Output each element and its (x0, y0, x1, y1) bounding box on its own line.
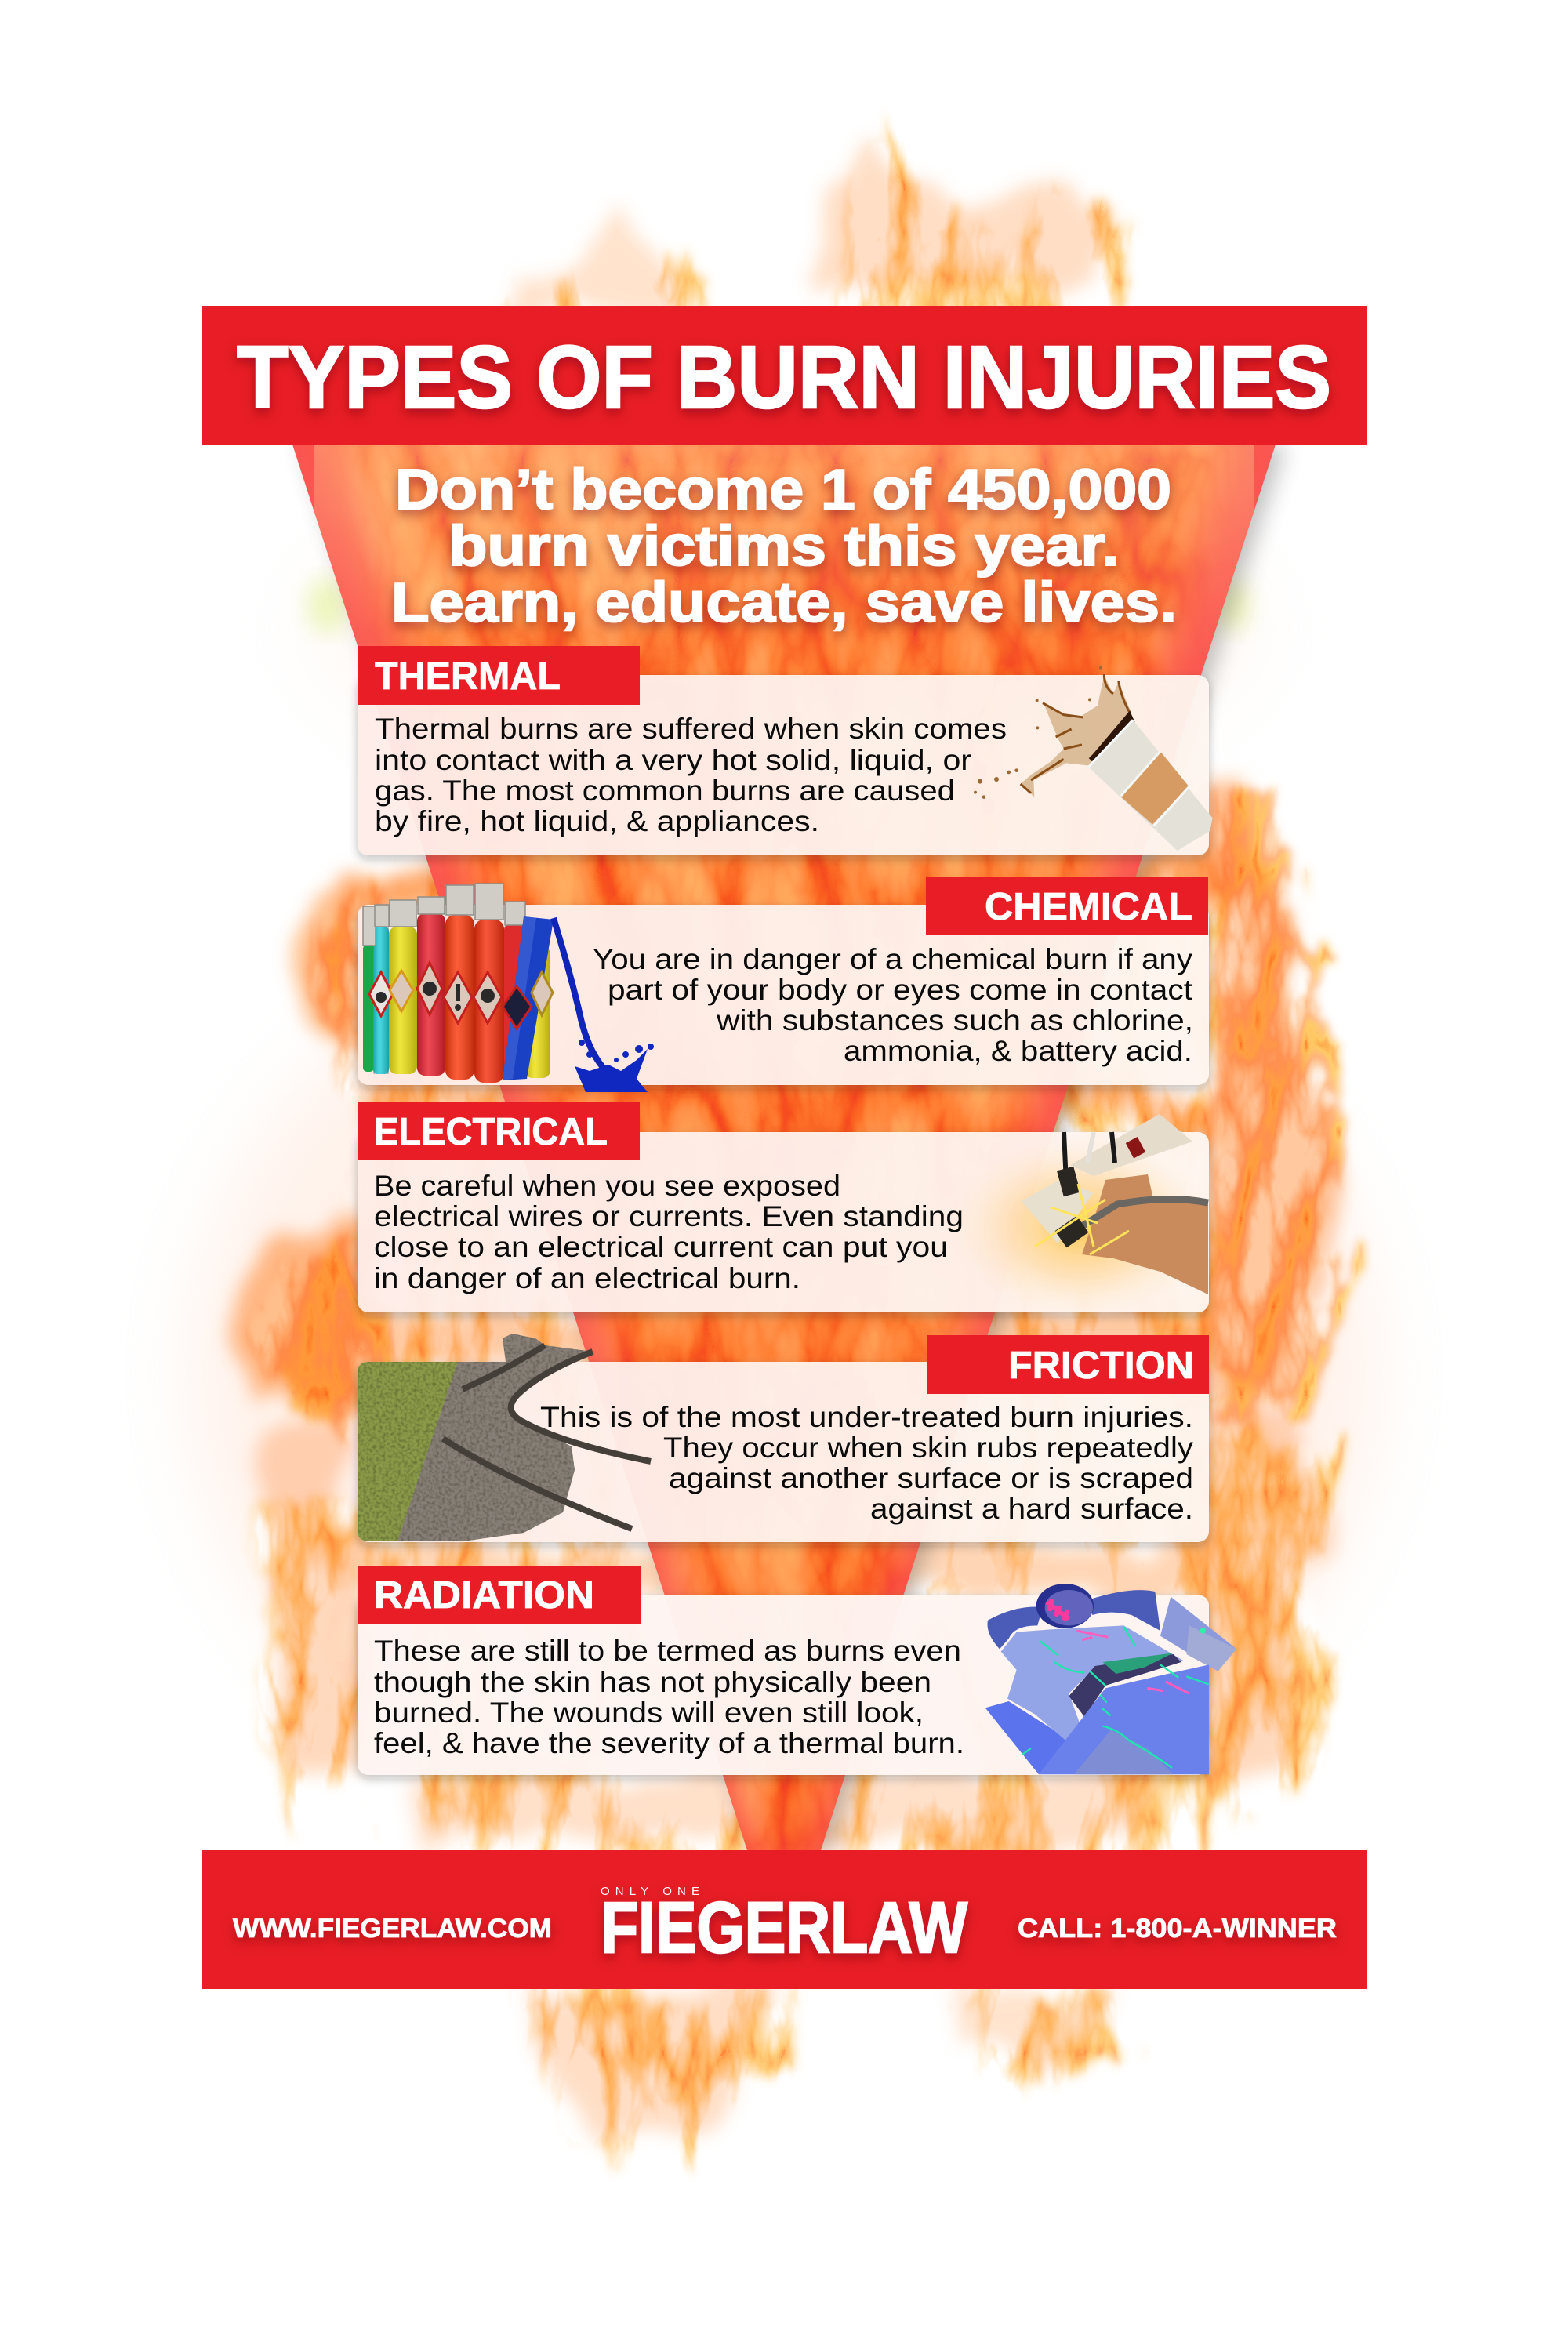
heading tag: radiation: RADIATION (374, 1574, 594, 1617)
text: friction: This is of the most under-treated burn injuries. (540, 1401, 1193, 1433)
text: radiation: though the skin has not physically been (374, 1666, 931, 1698)
icon: sparking power strip and hand (953, 1114, 1211, 1317)
text: electrical (374, 1170, 964, 1294)
heading tag: radiation (358, 1566, 641, 1624)
funnel with fire (292, 445, 1276, 1850)
heading tag: electrical (358, 1102, 640, 1160)
panel: radiation (358, 1566, 1236, 1775)
infographic (183, 114, 1385, 2176)
logo: FIEGERLAW (601, 1888, 967, 1968)
panel: friction (358, 1334, 1209, 1542)
heading tag: chemical: CHEMICAL (985, 886, 1192, 928)
text: thermal: into contact with a very hot solid, liquid, or (375, 744, 971, 776)
icon: chemical tubes (363, 884, 608, 1083)
heading tag: thermal (358, 646, 640, 705)
text: thermal (375, 713, 1007, 837)
text: electrical: in danger of an electrical burn. (374, 1262, 800, 1294)
text: electrical: close to an electrical current can put you (374, 1231, 948, 1263)
icon: road with skid marks (358, 1334, 651, 1541)
text: thermal: Thermal burns are suffered when skin comes (375, 713, 1007, 745)
background: saturated side flames (243, 757, 1333, 1419)
background: flame halo (188, 447, 1380, 1858)
text: friction (540, 1401, 1194, 1525)
background: yellow flame glints (307, 577, 1250, 633)
text: friction: against another surface or is scraped (669, 1462, 1193, 1494)
subtitle: Don’t become 1 of 450,000 (395, 459, 1171, 521)
panel: chemical (358, 877, 1209, 1092)
background: peach flame wash (243, 133, 1333, 2132)
funnel shadow (302, 445, 1286, 1850)
icon: radiation therapy patient (985, 1584, 1236, 1774)
icon: spilled coffee cup (974, 666, 1213, 851)
text: chemical: ammonia, & battery acid. (844, 1035, 1192, 1067)
icon: blue splash (575, 1040, 654, 1092)
heading tag: friction: FRICTION (1008, 1345, 1194, 1387)
text: electrical: electrical wires or currents. Even standing (374, 1200, 964, 1232)
text: electrical: Be careful when you see exposed (374, 1170, 840, 1202)
logo: ONLY ONE (601, 1885, 699, 1898)
panel: thermal (358, 646, 1213, 855)
text: radiation (374, 1635, 964, 1759)
text: chemical: with substances such as chlorine, (716, 1004, 1193, 1036)
text: radiation: These are still to be termed as burns even (374, 1635, 961, 1667)
subtitle: Learn, educate, save lives. (391, 572, 1177, 634)
title banner (202, 306, 1367, 445)
panel: electrical (358, 1102, 1211, 1317)
title: TYPES OF BURN INJURIES (237, 328, 1331, 426)
heading tag: electrical: ELECTRICAL (374, 1111, 608, 1153)
text: thermal: by fire, hot liquid, & appliances. (375, 805, 819, 837)
heading tag: friction (927, 1335, 1209, 1394)
background: pale flames (235, 110, 1317, 2148)
footer website: WWW.FIEGERLAW.COM (233, 1914, 552, 1944)
footer banner (202, 1850, 1367, 1989)
text: friction: against a hard surface. (870, 1493, 1193, 1525)
subtitle (391, 459, 1177, 634)
footer phone: CALL: 1-800-A-WINNER (1018, 1914, 1337, 1944)
heading tag: chemical (926, 877, 1208, 935)
text: radiation: burned. The wounds will even still look, (374, 1697, 924, 1729)
subtitle: burn victims this year. (448, 515, 1120, 578)
heading tag: thermal: THERMAL (375, 655, 561, 698)
text: chemical (593, 943, 1193, 1067)
text: radiation: feel, & have the severity of a thermal burn. (374, 1727, 964, 1759)
text: chemical: part of your body or eyes come in contact (608, 974, 1193, 1006)
text: thermal: gas. The most common burns are caused (375, 775, 955, 807)
text: friction: They occur when skin rubs repeatedly (663, 1432, 1194, 1464)
text: chemical: You are in danger of a chemical burn if any (593, 943, 1193, 975)
